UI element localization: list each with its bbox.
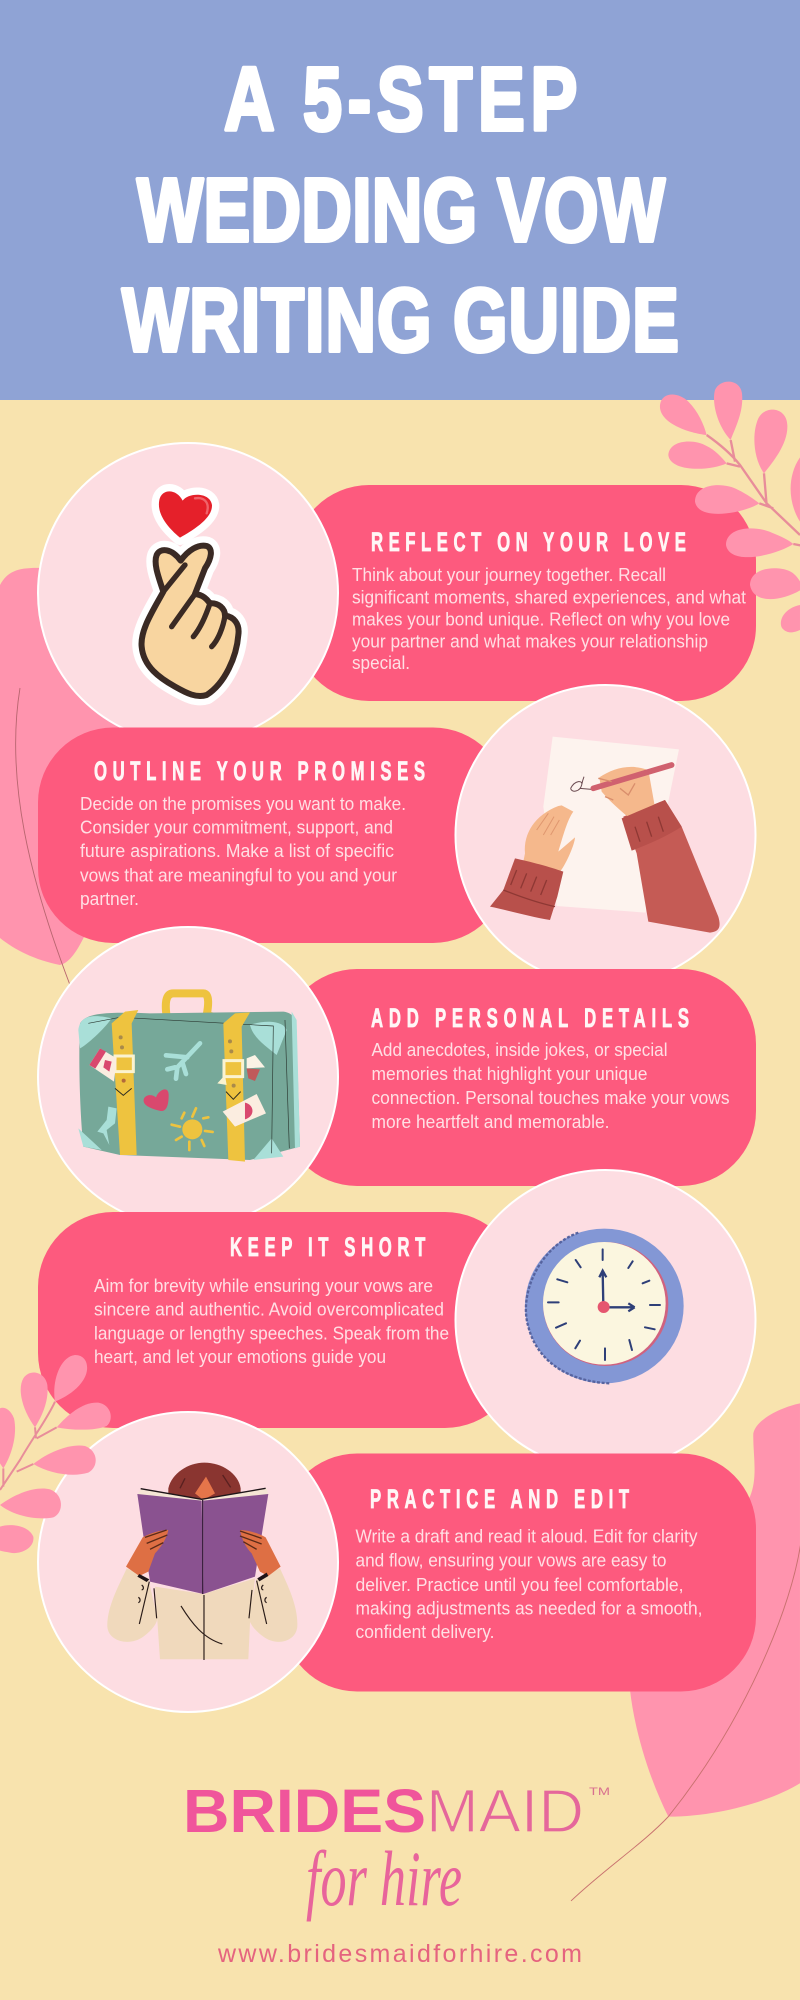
logo: bridesmaid for hire: TM [589, 1786, 610, 1798]
step 1: reflect on your love [38, 443, 756, 743]
body: step 5 [356, 1526, 702, 1642]
header band [0, 0, 800, 400]
pill: step 3 [282, 969, 756, 1186]
body: step 1: special. [352, 653, 410, 673]
decorative branch: bottom left [0, 1355, 111, 1553]
body: step 2 [80, 794, 406, 909]
logo: bridesmaid for hire: for hire [306, 1835, 462, 1922]
step 4: keep it short [38, 1170, 756, 1470]
heading: step 1: REFLECT ON YOUR LOVE [371, 527, 686, 557]
step 3: add personal details [38, 927, 756, 1227]
icon: person reading book [107, 1463, 297, 1660]
body: step 2: Decide on the promises you want to make. [80, 794, 406, 814]
body: step 3: memories that highlight your unique [372, 1064, 648, 1084]
body: step 5: making adjustments as needed for a smooth, [356, 1599, 702, 1619]
body: step 3: Add anecdotes, inside jokes, or special [372, 1040, 668, 1060]
icon: clock [525, 1229, 684, 1383]
icon: suitcase [78, 993, 300, 1162]
pill: step 2 [38, 728, 508, 943]
heading: step 2: OUTLINE YOUR PROMISES [94, 756, 425, 786]
body: step 2: vows that are meaningful to you and your [80, 866, 397, 886]
logo: bridesmaid for hire: MAID [426, 1777, 584, 1845]
body: step 4: sincere and authentic. Avoid overcomplicated [94, 1300, 444, 1320]
body: step 2: Consider your commitment, support, and [80, 818, 393, 838]
body: step 3: more heartfelt and memorable. [372, 1112, 610, 1132]
heading: step 3: ADD PERSONAL DETAILS [371, 1003, 689, 1033]
pill: step 4 [38, 1212, 520, 1428]
title [122, 50, 679, 371]
body: step 5: confident delivery. [356, 1622, 494, 1642]
body: step 1: Think about your journey together. Recall [352, 565, 666, 585]
title: WEDDING VOW [137, 161, 666, 261]
step 5: practice and edit [38, 1412, 756, 1712]
title: A 5-STEP [224, 50, 577, 150]
pill: step 5 [282, 1454, 756, 1692]
body: step 2: partner. [80, 889, 139, 909]
body: step 4: heart, and let your emotions guide you [94, 1347, 386, 1367]
body: step 3: connection. Personal touches make your vows [372, 1088, 730, 1108]
decorative leaf: left [0, 568, 240, 985]
body: step 4: Aim for brevity while ensuring your vows are [94, 1276, 433, 1296]
circle: step 5 [38, 1412, 338, 1712]
body: step 3 [372, 1040, 730, 1132]
icon: hands writing [490, 737, 720, 933]
body: step 1 [352, 565, 746, 673]
icon: finger heart [142, 491, 239, 696]
website url: www.bridesmaidforhire.com [217, 1940, 582, 1968]
logo: bridesmaid for hire: BRIDES [183, 1777, 426, 1845]
heading: step 4: KEEP IT SHORT [230, 1232, 426, 1262]
body: step 5: deliver. Practice until you feel comfortable, [356, 1575, 684, 1595]
body: step 4: language or lengthy speeches. Speak from the [94, 1324, 449, 1344]
circle: step 4 [456, 1170, 756, 1470]
pill: step 1 [294, 485, 756, 701]
logo: bridesmaid for hire [183, 1777, 610, 1922]
body: step 4 [94, 1276, 449, 1367]
body: step 1: makes your bond unique. Reflect on why you love [352, 610, 730, 630]
body: step 5: and flow, ensuring your vows are easy to [356, 1551, 666, 1571]
circle: step 1 [38, 443, 338, 743]
decorative leaf: bottom right [571, 1403, 800, 1901]
title: WRITING GUIDE [122, 271, 679, 371]
body: step 1: your partner and what makes your relationship [352, 632, 708, 652]
heading: step 5: PRACTICE AND EDIT [370, 1484, 629, 1514]
body: step 5: Write a draft and read it aloud. Edit for clarity [356, 1526, 698, 1546]
step 2: outline your promises [38, 685, 756, 985]
circle: step 3 [38, 927, 338, 1227]
circle: step 2 [456, 685, 756, 985]
body: step 2: future aspirations. Make a list of specific [80, 841, 394, 861]
body: step 1: significant moments, shared experiences, and what [352, 588, 746, 608]
decorative branch: top right [660, 382, 800, 632]
